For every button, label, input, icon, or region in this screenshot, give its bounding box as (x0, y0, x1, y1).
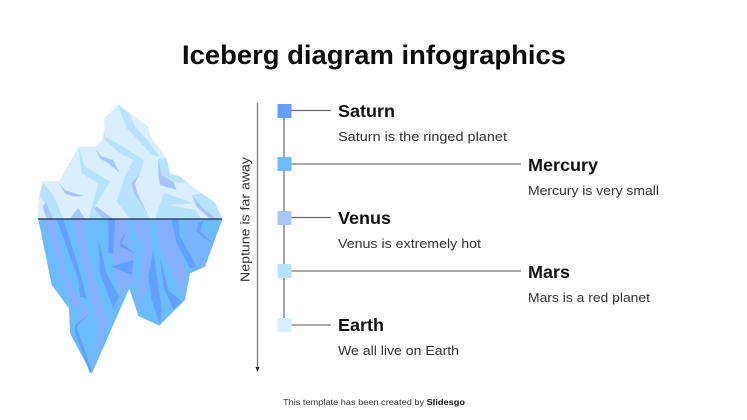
item: Earth: Earth (338, 315, 384, 335)
item: Earth (278, 315, 459, 358)
item: Saturn: Saturn is the ringed planet (338, 129, 507, 144)
item: Mercury (278, 155, 659, 198)
water line (38, 218, 222, 220)
iceberg above water (37, 104, 222, 219)
item: Mars (278, 262, 650, 305)
iceberg illustration (37, 104, 222, 374)
item: Mars: Mars (528, 262, 570, 282)
timeline spine (283, 110, 285, 324)
item: Earth: We all live on Earth (338, 343, 459, 358)
iceberg below water (38, 219, 222, 374)
item: Mercury: Mercury (528, 155, 598, 175)
item: Venus (278, 208, 481, 251)
title: Iceberg diagram infographics (182, 40, 566, 70)
item: Saturn (278, 101, 507, 144)
item: Venus: Venus is extremely hot (338, 236, 481, 251)
depth arrow (256, 103, 260, 372)
item: Saturn: Saturn (338, 101, 395, 121)
item: Venus: Venus (338, 208, 391, 228)
footer credit: This template has been created by Slidesgo (283, 397, 465, 407)
depth arrow label: Neptune is far away (238, 156, 252, 282)
item: Mars: Mars is a red planet (528, 290, 650, 305)
item: Mercury: Mercury is very small (528, 183, 659, 198)
